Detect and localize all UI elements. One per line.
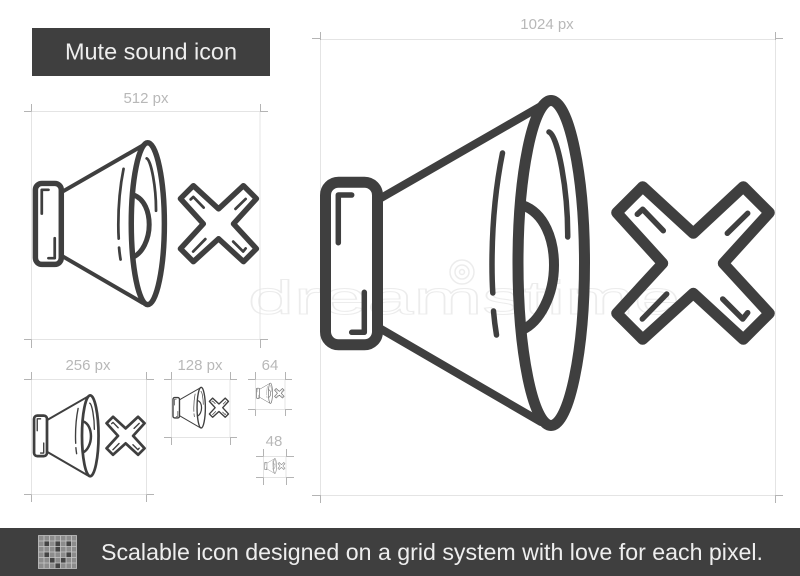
icon: mute speaker 48 px <box>265 459 285 473</box>
label: 128 px: 128 px <box>177 357 223 374</box>
label: 48: 48 <box>266 433 282 450</box>
label: 64: 64 <box>262 357 278 374</box>
title banner <box>32 28 270 76</box>
icon: mute speaker 64 px <box>256 383 284 403</box>
panel: 48 px grid <box>256 433 294 485</box>
label: 512 px: 512 px <box>123 90 169 107</box>
panel: 128 px grid <box>164 357 237 445</box>
title banner: Mute sound icon <box>65 38 237 64</box>
label: 1024 px: 1024 px <box>520 16 574 33</box>
watermark <box>248 260 680 324</box>
icon: mute speaker 128 px <box>173 387 228 428</box>
panel: 512 px grid <box>24 90 268 348</box>
panel: 256 px grid <box>24 357 154 502</box>
icon: mute speaker 512 px <box>35 143 256 305</box>
icon: mute speaker 256 px <box>34 395 145 476</box>
icon: mute speaker 1024 px <box>326 100 769 426</box>
footer tagline: Scalable icon designed on a grid system with love for each pixel. <box>101 539 763 565</box>
footer bar <box>0 528 800 576</box>
label: 256 px: 256 px <box>65 357 111 374</box>
icon: pixel grid <box>38 536 76 568</box>
watermark: dreamstime <box>248 271 680 324</box>
panel: 64 px grid <box>248 357 292 416</box>
